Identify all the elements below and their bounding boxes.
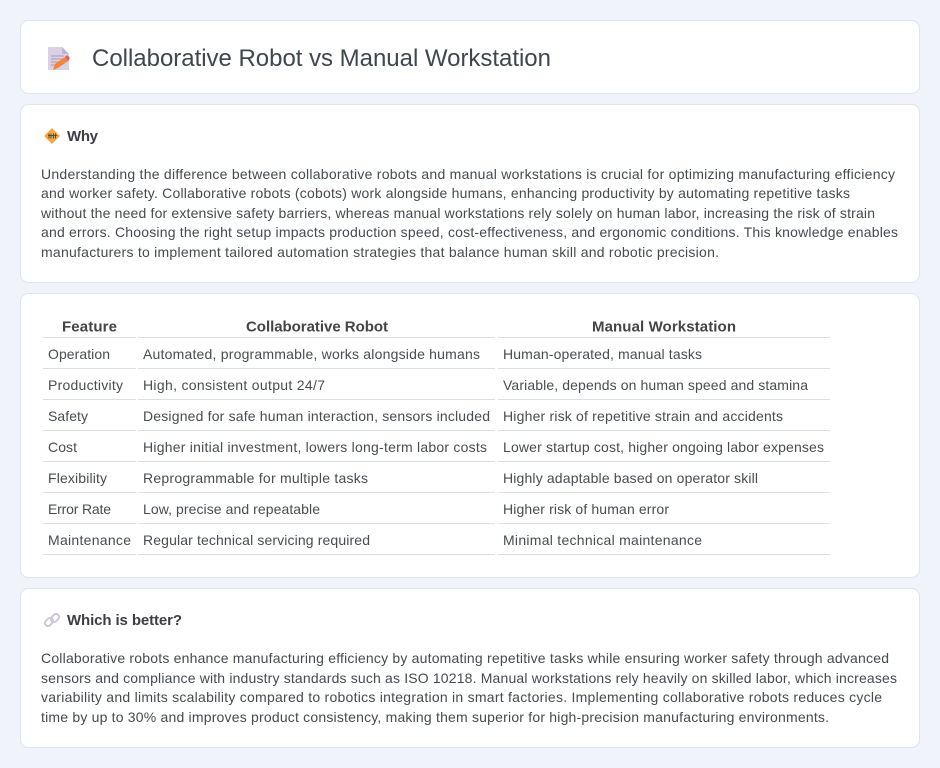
text block: which is better: variability and limits scalability compared to robotics integration in smart factories. Implementing collaborative robots reduces cycle bbox=[41, 689, 882, 705]
comparison table: Reprogrammable for multiple tasks bbox=[143, 470, 368, 486]
comparison table: Higher initial investment, lowers long-term labor costs bbox=[143, 439, 487, 455]
text block: why bbox=[40, 166, 898, 260]
comparison table: Cost bbox=[48, 439, 77, 455]
text block: why: and errors. Choosing the right setup impacts production speed, cost-effectiveness, and ergonomic conditions. This knowledge enables bbox=[41, 224, 898, 240]
comparison table: Maintenance bbox=[48, 532, 131, 548]
text block: which is better bbox=[41, 650, 897, 725]
panel: which is better bbox=[20, 588, 920, 748]
comparison table: Higher risk of repetitive strain and accidents bbox=[503, 408, 783, 424]
comparison table: Human-operated, manual tasks bbox=[503, 346, 702, 362]
comparison table: Manual Workstation bbox=[592, 318, 736, 336]
comparison table: Regular technical servicing required bbox=[143, 532, 370, 548]
title: Collaborative Robot vs Manual Workstation bbox=[92, 45, 551, 72]
text block: why: without the need for extensive safety barriers, whereas manual workstations rely solely on human labor, increasing the risk of strain bbox=[40, 205, 875, 221]
text block: why: and worker safety. Collaborative robots (cobots) work alongside humans, enhancing productivity by automating repetitive tasks bbox=[41, 185, 850, 201]
text block: why: Understanding the difference between collaborative robots and manual workstations is crucial for optimizing manufacturing efficiency bbox=[41, 166, 895, 182]
icon: document with pencil bbox=[48, 47, 70, 70]
comparison table: Highly adaptable based on operator skill bbox=[503, 470, 758, 486]
comparison table: Higher risk of human error bbox=[503, 501, 669, 517]
comparison table: Designed for safe human interaction, sensors included bbox=[143, 408, 490, 424]
comparison table: Minimal technical maintenance bbox=[503, 532, 702, 548]
heading: which is better: Which is better? bbox=[67, 612, 182, 629]
comparison table: Collaborative Robot bbox=[246, 318, 388, 336]
icon: warning diamond bbox=[44, 128, 60, 144]
panel: why bbox=[20, 104, 920, 282]
comparison table: Error Rate bbox=[48, 501, 111, 517]
comparison table: Lower startup cost, higher ongoing labor expenses bbox=[503, 439, 824, 455]
comparison table bbox=[43, 318, 830, 555]
icon: link bbox=[44, 613, 60, 627]
comparison table: High, consistent output 24/7 bbox=[143, 377, 325, 393]
text block: why: manufacturers to implement tailored automation strategies that balance human skill and robotic precision. bbox=[41, 244, 719, 260]
comparison table: Flexibility bbox=[48, 470, 107, 486]
panel: title card bbox=[20, 20, 920, 94]
text block: which is better: time by up to 30% and improves product consistency, making them superior for high-precision manufacturing environments. bbox=[41, 709, 829, 725]
text block: which is better: sensors and compliance with industry standards such as ISO 10218. Manual workstations rely heavily on skilled labor, which increases bbox=[41, 670, 897, 686]
panel: comparison table card bbox=[20, 294, 920, 578]
comparison table: Safety bbox=[48, 408, 88, 424]
comparison table: Productivity bbox=[48, 377, 123, 393]
comparison table: Automated, programmable, works alongside humans bbox=[143, 346, 480, 362]
comparison table: Low, precise and repeatable bbox=[143, 501, 320, 517]
comparison table: Variable, depends on human speed and stamina bbox=[503, 377, 808, 393]
comparison table: Feature bbox=[62, 318, 117, 336]
text block: which is better: Collaborative robots enhance manufacturing efficiency by automating repetitive tasks while ensuring worker safety through advanced bbox=[41, 650, 889, 666]
heading: why: Why bbox=[67, 128, 99, 145]
comparison table: Operation bbox=[48, 346, 110, 362]
